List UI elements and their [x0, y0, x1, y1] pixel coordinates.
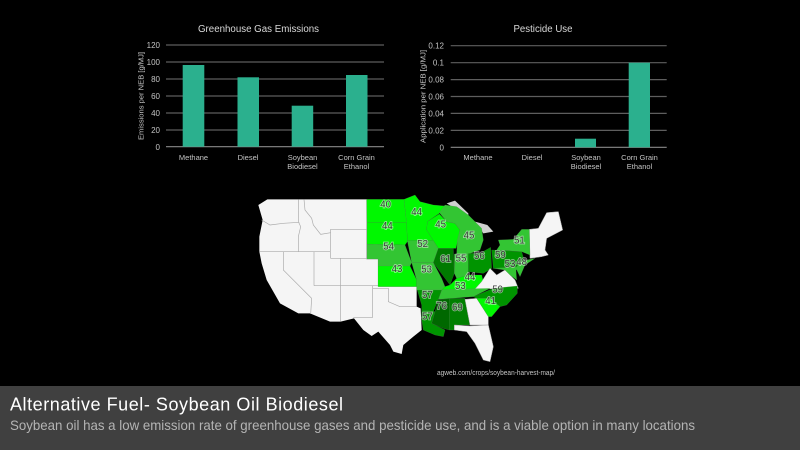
category labels: Biodiesel — [287, 162, 318, 171]
New Jersey and Delaware — [516, 258, 535, 277]
state values: 54 — [383, 242, 395, 253]
y axis title: Emissions per NEB [g/MJ] — [136, 52, 146, 140]
South Carolina — [477, 298, 500, 317]
Iowa — [407, 241, 438, 263]
Great Plains states — [367, 199, 407, 223]
y axis ticks: 120 — [147, 41, 161, 50]
North Carolina — [473, 286, 517, 307]
state values: 55 — [456, 254, 466, 265]
category labels: Diesel — [522, 153, 543, 162]
y axis ticks: 0 — [156, 143, 161, 152]
map: soybean harvest by state — [258, 195, 563, 362]
y axis ticks: 20 — [151, 126, 161, 135]
category labels: Biodiesel — [571, 162, 602, 171]
Ohio — [468, 247, 492, 273]
bar chart: pesticide use — [418, 24, 667, 171]
y axis title: Application per NEB [g/MJ] — [418, 50, 428, 143]
Virginia and West Virginia — [475, 268, 518, 289]
Missouri — [412, 263, 445, 290]
state values: 44 — [382, 221, 393, 232]
y axis ticks: 0.02 — [428, 126, 445, 135]
y axis ticks: 80 — [151, 75, 161, 84]
state values: 57 — [422, 290, 433, 301]
state values: 56 — [474, 251, 485, 262]
Pennsylvania — [492, 250, 525, 268]
bar chart: greenhouse gas emissions — [136, 24, 384, 171]
category labels: Ethanol — [344, 162, 370, 171]
Michigan — [439, 205, 483, 254]
Tennessee — [438, 288, 490, 299]
category labels: Corn Grain — [338, 153, 375, 162]
state values: 76 — [436, 301, 447, 312]
Indiana — [454, 254, 468, 278]
category labels: Methane — [463, 153, 493, 162]
Louisiana — [422, 310, 445, 337]
state values: 45 — [435, 220, 446, 231]
chart title: greenhouse gas emissions: Greenhouse Gas Emissions — [198, 24, 319, 35]
state values: 41 — [485, 296, 496, 307]
Florida — [454, 325, 493, 362]
state values: 57 — [422, 312, 433, 323]
category labels: Diesel — [238, 153, 259, 162]
category labels: Soybean — [288, 153, 317, 162]
caption band — [0, 386, 800, 450]
state values: 48 — [516, 257, 527, 268]
state values: 43 — [392, 264, 402, 275]
bars — [183, 65, 368, 147]
Great Lakes shore — [447, 201, 493, 233]
y axis ticks — [428, 42, 445, 152]
Wisconsin — [427, 214, 460, 248]
y axis ticks: 60 — [151, 92, 161, 101]
Georgia — [465, 298, 488, 325]
New England — [529, 212, 563, 258]
y axis ticks: 0.04 — [428, 109, 445, 118]
state values: 53 — [505, 259, 515, 270]
Arkansas — [417, 290, 442, 312]
source credit: agweb.com/crops/soybean-harvest-map/ — [437, 370, 555, 377]
y axis ticks: 0.06 — [428, 92, 445, 102]
Maryland — [493, 267, 520, 280]
state values: 53 — [421, 265, 432, 276]
y axis ticks: 0 — [440, 143, 445, 152]
category labels: Methane — [179, 153, 208, 162]
state values: 59 — [495, 250, 506, 261]
state values: 59 — [492, 285, 503, 296]
y axis ticks: 0.1 — [433, 59, 445, 68]
New York — [497, 229, 530, 255]
Alabama — [449, 298, 470, 330]
state values: 53 — [455, 281, 466, 292]
state values: 52 — [417, 239, 428, 250]
category labels — [179, 153, 375, 171]
state values: 44 — [411, 207, 423, 218]
y axis ticks: 0.08 — [428, 76, 445, 85]
y axis ticks: 100 — [147, 58, 161, 67]
central and eastern states — [367, 195, 563, 362]
caption title: Alternative Fuel- Soybean Oil Biodiesel — [10, 394, 343, 414]
state values: 51 — [514, 236, 525, 247]
Minnesota — [404, 195, 445, 241]
state values: 40 — [380, 200, 391, 211]
y axis ticks: 0.12 — [428, 42, 445, 51]
state values: 69 — [452, 303, 463, 314]
caption text: Soybean oil has a low emission rate of greenhouse gases and pesticide use, and is a viable option in many locations — [10, 417, 695, 433]
state values — [380, 200, 527, 323]
bars — [575, 63, 650, 147]
chart title: pesticide use: Pesticide Use — [514, 24, 573, 35]
category labels: Soybean — [571, 153, 601, 162]
Illinois — [433, 248, 454, 285]
state values: 44 — [465, 272, 476, 283]
category labels: Ethanol — [627, 162, 653, 171]
category labels: Corn Grain — [621, 153, 658, 162]
Mississippi — [432, 298, 449, 330]
state values: 61 — [440, 254, 451, 265]
y axis ticks — [147, 41, 161, 152]
Kentucky — [442, 275, 483, 290]
state values: 45 — [464, 231, 474, 242]
y axis ticks: 40 — [151, 109, 161, 118]
category labels — [463, 153, 658, 171]
western states — [258, 199, 422, 354]
